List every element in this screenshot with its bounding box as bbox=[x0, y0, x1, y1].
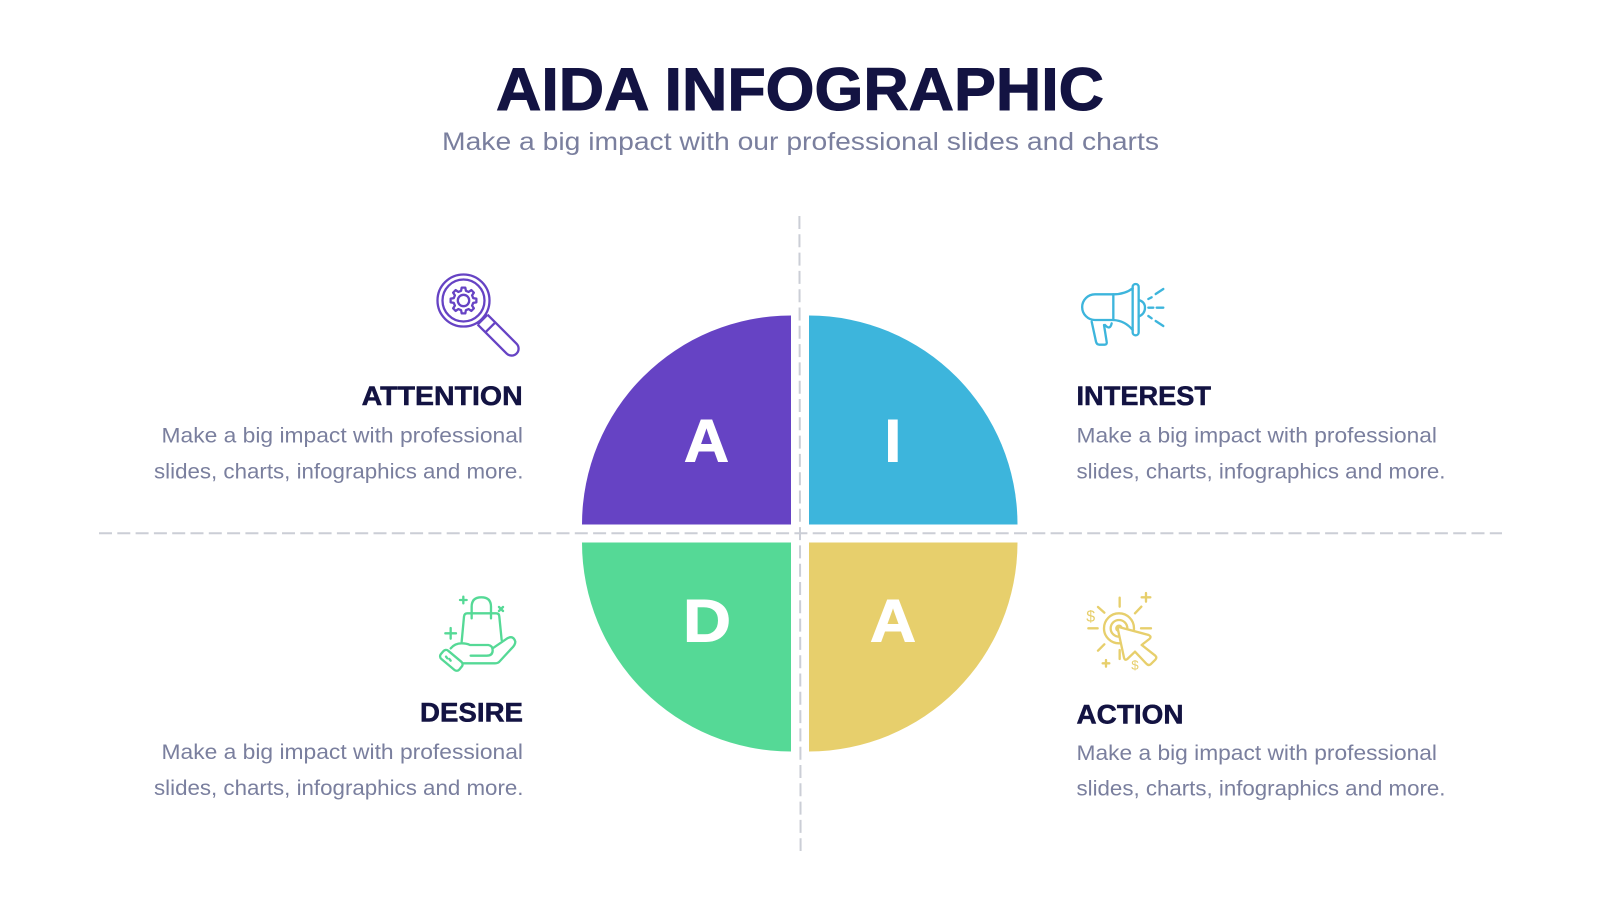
text: action description: Make a big impact with professional bbox=[1076, 742, 1437, 765]
quadrant: D desire bbox=[582, 542, 791, 752]
text: interest description: slides, charts, infographics and more. bbox=[1076, 460, 1446, 483]
text: desire description: Make a big impact with professional bbox=[162, 741, 523, 764]
quadrant: A attention bbox=[582, 316, 791, 524]
panel: attention bbox=[154, 274, 524, 483]
subtitle: Make a big impact with our professional slides and charts bbox=[442, 128, 1159, 156]
text: interest description: Make a big impact with professional bbox=[1076, 425, 1437, 448]
icon: cursor click bbox=[1086, 593, 1156, 673]
icon: megaphone bbox=[1082, 284, 1163, 345]
panel: interest bbox=[1076, 284, 1446, 483]
icon: cursor click: $ bbox=[1086, 609, 1095, 626]
panel: action bbox=[1076, 593, 1446, 801]
heading: action: ACTION bbox=[1076, 699, 1184, 729]
quadrant: A action bbox=[809, 542, 1018, 752]
heading: attention: ATTENTION bbox=[362, 381, 523, 411]
heading: interest: INTEREST bbox=[1076, 381, 1212, 411]
text: action description bbox=[1076, 742, 1446, 801]
text: action description: slides, charts, infographics and more. bbox=[1076, 778, 1446, 801]
quadrant: D desire: D bbox=[683, 588, 731, 654]
icon: cursor click: $ bbox=[1131, 658, 1139, 673]
icon: magnifier with gear bbox=[438, 274, 521, 358]
heading: desire: DESIRE bbox=[420, 698, 523, 728]
text: attention description: slides, charts, infographics and more. bbox=[154, 460, 524, 483]
quadrant: I interest bbox=[809, 316, 1018, 524]
text: attention description bbox=[154, 425, 524, 483]
quadrant: I interest: I bbox=[884, 408, 901, 474]
text: interest description bbox=[1076, 425, 1446, 483]
text: desire description bbox=[154, 741, 524, 800]
quadrant: A action: A bbox=[870, 588, 916, 654]
text: desire description: slides, charts, infographics and more. bbox=[154, 777, 524, 800]
quadrant chart bbox=[582, 316, 1018, 752]
quadrant: A attention: A bbox=[684, 408, 729, 474]
panel: desire bbox=[154, 597, 524, 800]
text: attention description: Make a big impact with professional bbox=[162, 425, 523, 448]
icon: hand holding shopping bag bbox=[439, 597, 515, 672]
title: AIDA INFOGRAPHIC bbox=[496, 56, 1104, 123]
